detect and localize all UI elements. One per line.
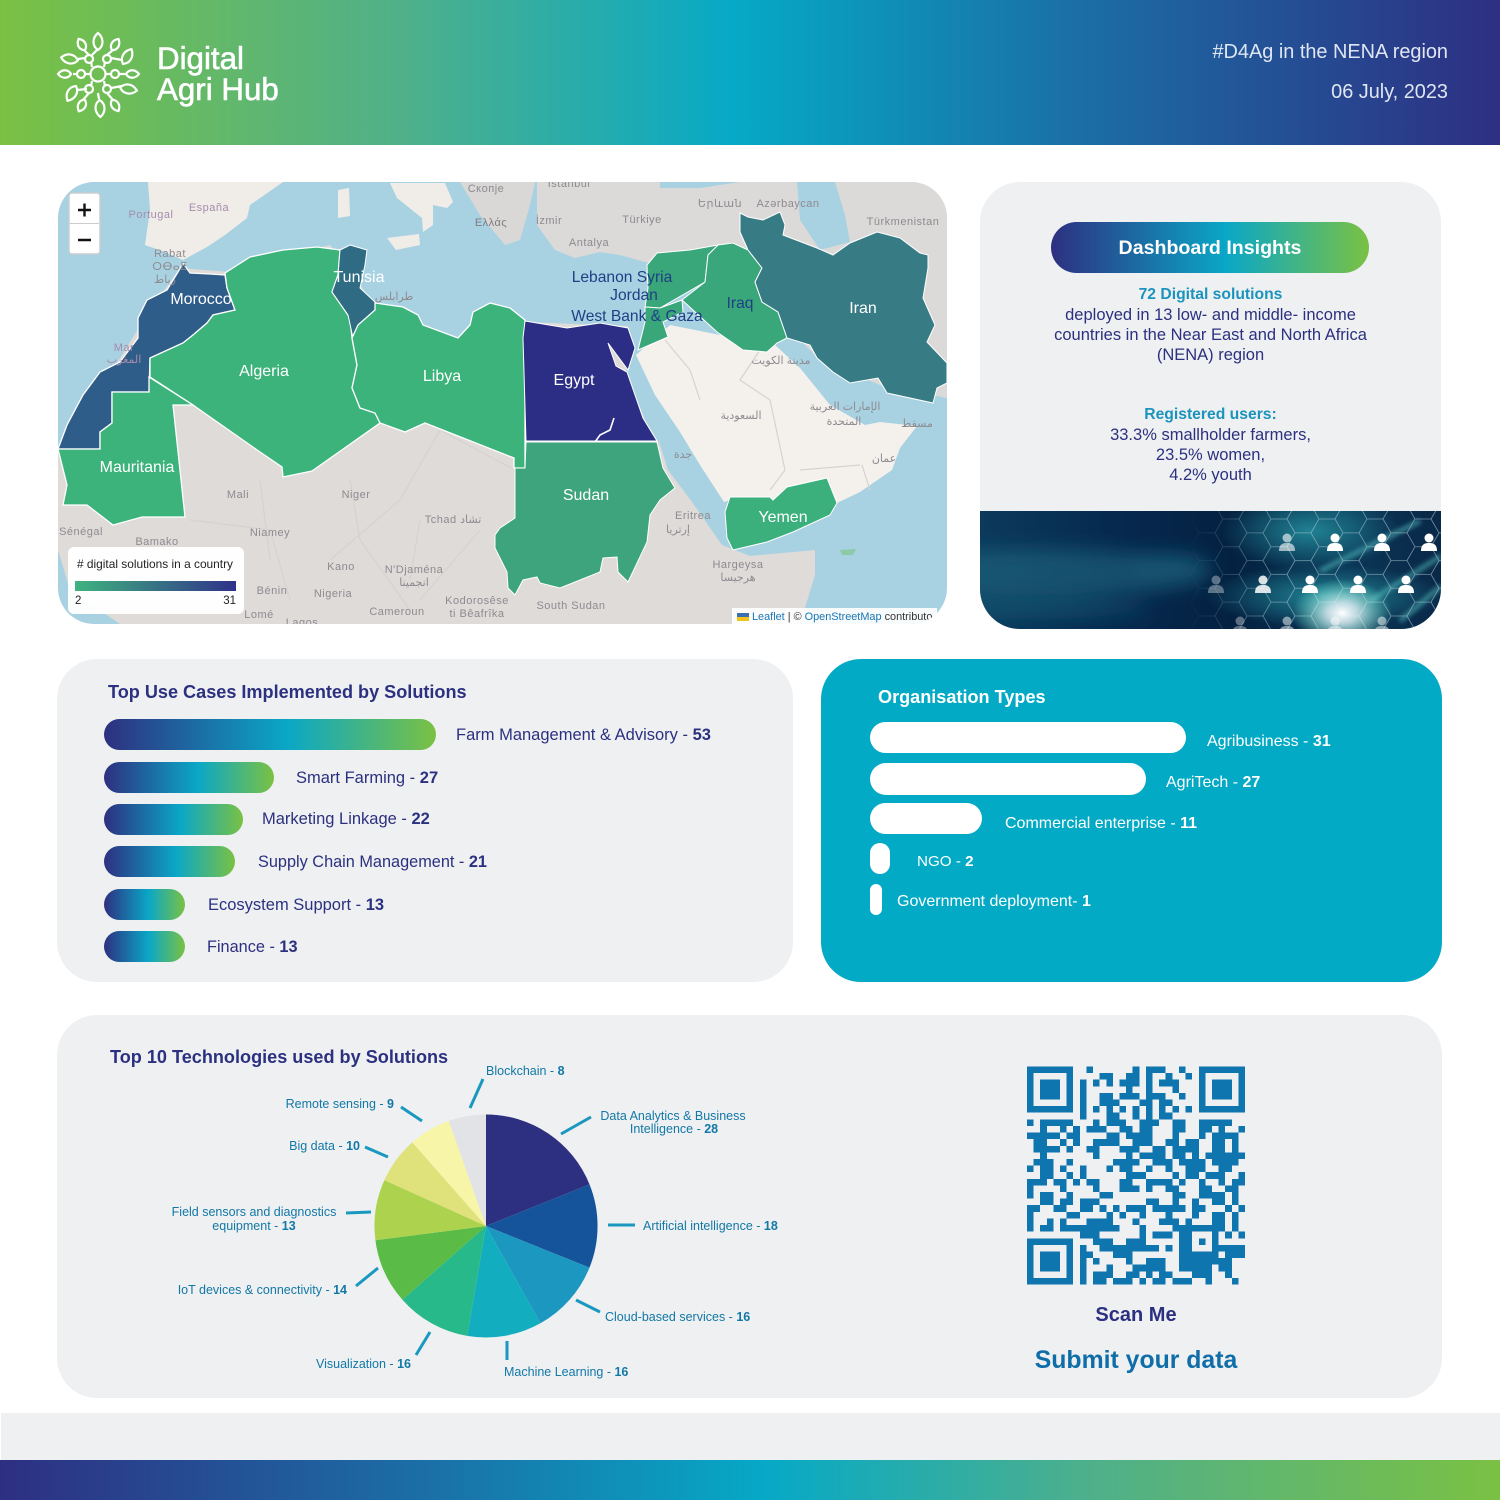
bar: Farm Management <box>104 719 436 750</box>
pie slices <box>374 1114 598 1337</box>
dashboard insights pill heading <box>1051 222 1369 273</box>
insight: registered users <box>1110 406 1311 484</box>
bar: Marketing Linkage <box>104 804 243 835</box>
tile labels: İstanbul <box>548 177 590 190</box>
tile labels: Tchad تشاد <box>425 514 481 526</box>
country labels: Algeria <box>239 363 289 380</box>
base land <box>58 182 947 624</box>
header subtitle and date <box>1212 41 1448 103</box>
tile labels: Sénégal <box>59 526 103 538</box>
tile labels: España <box>189 202 230 214</box>
country labels: Jordan <box>610 287 658 304</box>
pie labels: Cloud-based services - 16 <box>605 1310 750 1324</box>
country labels: Iran <box>849 300 877 317</box>
bar: AgriTech <box>870 763 1146 795</box>
map legend: # digital solutions in a country <box>77 557 233 571</box>
pie labels: Blockchain - 8 <box>486 1064 565 1078</box>
label: Supply Chain Management: Supply Chain Management - 21 <box>258 853 487 871</box>
country labels: Sudan <box>563 487 609 504</box>
tile labels: Cameroun <box>369 606 425 618</box>
label: AgriTech: AgriTech - 27 <box>1166 774 1260 791</box>
leader lines <box>346 1079 635 1360</box>
tile labels: Azərbaycan <box>756 198 820 210</box>
insight: digital solutions: (NENA) region <box>1157 346 1264 364</box>
country: Morocco and Western Sahara <box>58 263 235 449</box>
bar: Agribusiness <box>870 722 1186 753</box>
tile labels: Türkmenistan <box>867 216 939 228</box>
tile labels: Hargeysa <box>712 559 764 571</box>
tile labels: هرجيسا <box>720 572 756 584</box>
country: Iran <box>740 212 947 403</box>
country: Tunisia <box>332 245 375 338</box>
logo icon <box>56 32 140 118</box>
tile labels: Bamako <box>135 536 179 548</box>
country: Libya <box>352 303 525 468</box>
bar: Commercial enterprise <box>870 803 982 834</box>
country: Mauritania <box>58 377 193 525</box>
tile labels: انجمينا <box>399 577 429 589</box>
country labels: Lebanon Syria <box>572 269 673 286</box>
bar: Ecosystem Support <box>104 889 185 920</box>
tile labels: مسقط <box>901 418 933 430</box>
tile labels: Rabat <box>154 248 186 260</box>
panel: top use cases <box>57 659 793 982</box>
country: Algeria <box>150 247 380 477</box>
pie labels: Big data - 10 <box>289 1139 360 1153</box>
tile labels: Niamey <box>250 527 290 539</box>
tile labels: Kano <box>327 561 355 573</box>
tile labels: Eritrea <box>675 510 711 522</box>
country: Jordan <box>638 300 683 350</box>
tile labels: ti Bêafrîka <box>449 608 505 620</box>
label: Government deployment: Government deployment- 1 <box>897 893 1091 910</box>
river Nile <box>595 418 614 442</box>
tile labels: عمان <box>872 453 896 465</box>
map legend: 2 <box>75 595 81 607</box>
insight: registered users: 4.2% youth <box>1169 466 1252 484</box>
logo wordmark <box>156 41 279 107</box>
label: Marketing Linkage: Marketing Linkage - 22 <box>262 810 430 828</box>
organisation heading: Organisation Types <box>878 687 1046 707</box>
tile labels: İzmir <box>536 214 562 227</box>
tile labels: South Sudan <box>536 600 606 612</box>
tile labels: Antalya <box>569 237 609 249</box>
logo wordmark: Agri Hub <box>157 72 279 107</box>
zoom control <box>69 193 100 254</box>
QR code <box>1027 1066 1245 1284</box>
pie labels: Artificial intelligence - 18 <box>643 1219 778 1233</box>
country: Syria <box>645 245 718 308</box>
map attribution <box>732 608 937 624</box>
panel: organisation types <box>821 659 1442 982</box>
country labels: Yemen <box>758 509 808 526</box>
tile labels: Kodorosêse <box>445 595 509 607</box>
country: Iraq <box>682 243 787 352</box>
panel: choropleth map <box>58 182 947 624</box>
country labels: Mauritania <box>100 459 174 476</box>
country labels: Libya <box>423 368 461 385</box>
pie labels <box>172 1064 778 1379</box>
tile labels: Скопје <box>468 183 504 195</box>
bar: Government deployment <box>870 884 882 915</box>
panel: dashboard insights <box>980 182 1441 629</box>
country labels: Iraq <box>727 295 753 312</box>
header banner <box>0 0 1500 145</box>
label: Finance: Finance - 13 <box>207 938 298 956</box>
tile labels: Bénin <box>257 585 287 597</box>
country: Yemen <box>725 478 837 550</box>
bar: NGO <box>870 843 890 874</box>
tile labels: N'Djaména <box>385 564 444 576</box>
dashboard insights pill heading: Dashboard Insights <box>1119 237 1301 259</box>
tile labels: مدينة الكويت <box>751 355 811 367</box>
header subtitle and date: #D4Ag in the NENA region <box>1212 41 1448 63</box>
label: Farm Management: Farm Management & Advisory - 53 <box>456 726 711 744</box>
pie chart with labels <box>172 1064 778 1379</box>
header subtitle and date: 06 July, 2023 <box>1331 81 1448 103</box>
country labels: Morocco <box>170 291 232 308</box>
label: NGO: NGO - 2 <box>917 853 974 870</box>
insight: digital solutions: countries in the Near East and North Africa <box>1054 326 1367 344</box>
label: Ecosystem Support: Ecosystem Support - 13 <box>208 896 384 914</box>
tile labels: Lomé <box>244 609 274 621</box>
country labels: Egypt <box>554 372 595 389</box>
panel: top technologies <box>57 1015 1442 1398</box>
tile labels: السعودية <box>720 410 762 422</box>
insight: registered users: Registered users: <box>1144 406 1277 423</box>
tile labels: Türkiye <box>622 214 662 226</box>
bar: Supply Chain Management <box>104 846 235 877</box>
country: Egypt <box>523 321 657 441</box>
insight: digital solutions <box>1054 286 1367 364</box>
banner image: network of users <box>980 511 1441 629</box>
footer gradient bar <box>0 1460 1500 1500</box>
insight: registered users: 33.3% smallholder farmers, <box>1110 426 1311 444</box>
tile labels: Niger <box>342 489 370 501</box>
footer band <box>1 1413 1500 1460</box>
pie labels: Machine Learning - 16 <box>504 1365 628 1379</box>
tile labels: رباط <box>154 274 176 286</box>
bar: Finance <box>104 931 185 962</box>
tile labels: Ελλάς <box>475 217 507 229</box>
tile labels: ⵔⴱⴰⵟ <box>152 261 188 273</box>
tile labels: إرتريا <box>666 524 690 536</box>
logo wordmark: Digital <box>157 41 244 76</box>
pie labels: Intelligence - 28 <box>630 1122 718 1136</box>
insight: digital solutions: deployed in 13 low- and middle- income <box>1065 306 1356 324</box>
use cases heading: Top Use Cases Implemented by Solutions <box>108 682 467 702</box>
scan me caption: Scan Me <box>1095 1304 1177 1326</box>
tile labels: Երևան <box>698 198 742 210</box>
tile labels: المغرب <box>107 354 141 366</box>
pie labels: IoT devices & connectivity - 14 <box>178 1283 347 1297</box>
country labels <box>100 269 877 526</box>
map legend <box>68 547 244 614</box>
tile labels <box>59 177 939 629</box>
country labels: West Bank & Gaza <box>571 308 703 325</box>
country labels: Tunisia <box>334 269 385 286</box>
insight: registered users: 23.5% women, <box>1156 446 1265 464</box>
insight: digital solutions: 72 Digital solutions <box>1139 286 1282 303</box>
label: Smart Farming: Smart Farming - 27 <box>296 769 438 787</box>
map legend: 31 <box>223 595 236 607</box>
tile labels: Portugal <box>129 209 173 221</box>
tile labels: Nigeria <box>314 588 353 600</box>
pie labels: equipment - 13 <box>212 1219 296 1233</box>
pie labels: Field sensors and diagnostics <box>172 1205 336 1219</box>
technologies heading: Top 10 Technologies used by Solutions <box>110 1047 448 1067</box>
label: Agribusiness: Agribusiness - 31 <box>1207 733 1331 750</box>
tile labels: جدة <box>674 449 692 461</box>
tile labels: Mar <box>114 342 134 354</box>
country: Sudan <box>495 442 675 595</box>
tile labels: Lagos <box>286 617 318 629</box>
submit your data caption: Submit your data <box>1035 1347 1237 1374</box>
pie labels: Remote sensing - 9 <box>286 1097 394 1111</box>
tile labels: طرابلس <box>375 291 414 303</box>
tile labels: المتحدة <box>827 416 861 428</box>
bar: Smart Farming <box>104 762 274 793</box>
map attribution: Leaflet | © OpenStreetMap contributo <box>752 611 932 623</box>
pie labels: Visualization - 16 <box>316 1357 411 1371</box>
tile labels: Mali <box>227 489 249 501</box>
label: Commercial enterprise: Commercial enterprise - 11 <box>1005 815 1197 832</box>
tile labels: الإمارات العربية <box>810 401 880 413</box>
pie labels: Data Analytics & Business <box>600 1109 746 1123</box>
